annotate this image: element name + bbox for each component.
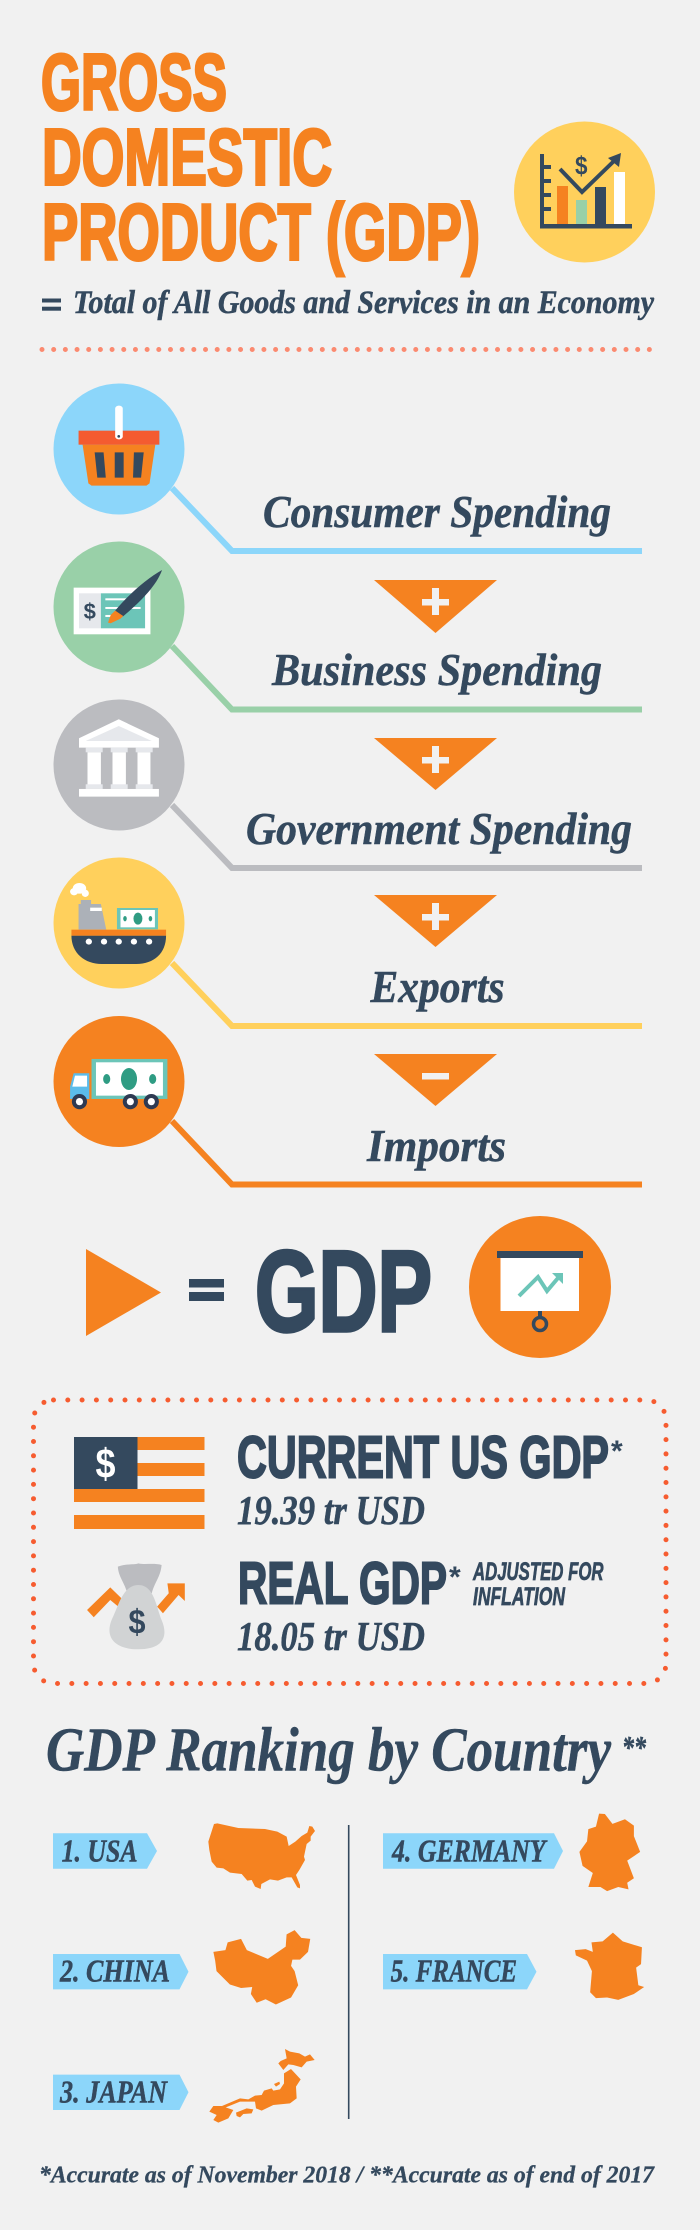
icon: chart in yellow circle: $	[575, 150, 588, 180]
equals sign	[189, 1279, 224, 1301]
icon: cargo ship	[54, 858, 184, 988]
plus triangle 3	[374, 895, 497, 947]
GDP result: GDP	[255, 1228, 432, 1356]
label: government spending: Government Spending	[246, 803, 632, 854]
icon: us flag	[74, 1437, 204, 1529]
label: exports: Exports	[370, 961, 504, 1012]
rank label: usa: 1. USA	[62, 1833, 138, 1869]
label: business spending: Business Spending	[271, 644, 602, 695]
rank label: japan: 3. JAPAN	[59, 2074, 169, 2110]
connector: business	[172, 646, 642, 710]
label: imports: Imports	[366, 1120, 506, 1171]
icon: us flag: $	[96, 1440, 116, 1487]
title: GROSS	[41, 38, 227, 126]
map: usa	[208, 1823, 315, 1889]
icon: money bag	[87, 1563, 185, 1649]
real gdp value: 18.05 tr USD	[237, 1613, 425, 1659]
footnote: *Accurate as of November 2018 / **Accurate as of end of 2017	[39, 2162, 655, 2188]
arrow: right pointing triangle	[86, 1249, 161, 1336]
connector: government	[172, 805, 642, 868]
map: germany	[579, 1814, 640, 1891]
connector: imports	[172, 1121, 642, 1184]
ranking heading: **	[622, 1729, 647, 1765]
adjusted for inflation note: ADJUSTED FOR	[472, 1558, 604, 1586]
icon: money truck	[54, 1016, 184, 1147]
adjusted for inflation note	[472, 1558, 604, 1611]
connector: exports	[172, 963, 642, 1026]
real gdp heading: *	[449, 1561, 461, 1594]
icon: shopping basket	[54, 384, 184, 514]
ranking heading: GDP Ranking by Country	[46, 1716, 611, 1784]
map: china	[213, 1930, 310, 2004]
rank label: germany: 4. GERMANY	[391, 1833, 547, 1869]
plus triangle 2	[374, 738, 497, 790]
real gdp heading: REAL GDP	[238, 1550, 447, 1616]
icon: money bag: $	[128, 1604, 146, 1642]
icon: chart in yellow circle	[514, 122, 655, 262]
icon: government building	[54, 700, 184, 830]
title: DOMESTIC	[42, 112, 332, 202]
icon: check and pen	[54, 542, 184, 672]
current us gdp heading: *	[611, 1435, 623, 1468]
subtitle: Total of All Goods and Services in an Economy	[73, 285, 654, 321]
icon: presentation board	[469, 1216, 611, 1358]
title	[41, 38, 480, 276]
title: PRODUCT (GDP)	[42, 188, 480, 276]
label: consumer spending: Consumer Spending	[263, 486, 611, 537]
current us gdp value: 19.39 tr USD	[237, 1487, 425, 1533]
dotted box panel	[34, 1400, 666, 1684]
adjusted for inflation note: INFLATION	[473, 1583, 566, 1611]
plus triangle 1	[374, 580, 497, 633]
connector: consumer	[172, 488, 642, 551]
icon: check and pen: $	[84, 599, 96, 624]
rank label: china: 2. CHINA	[59, 1953, 170, 1989]
minus triangle	[374, 1054, 497, 1106]
map: france	[575, 1933, 644, 2000]
map: japan	[209, 2049, 315, 2123]
rank label: france: 5. FRANCE	[391, 1953, 517, 1989]
